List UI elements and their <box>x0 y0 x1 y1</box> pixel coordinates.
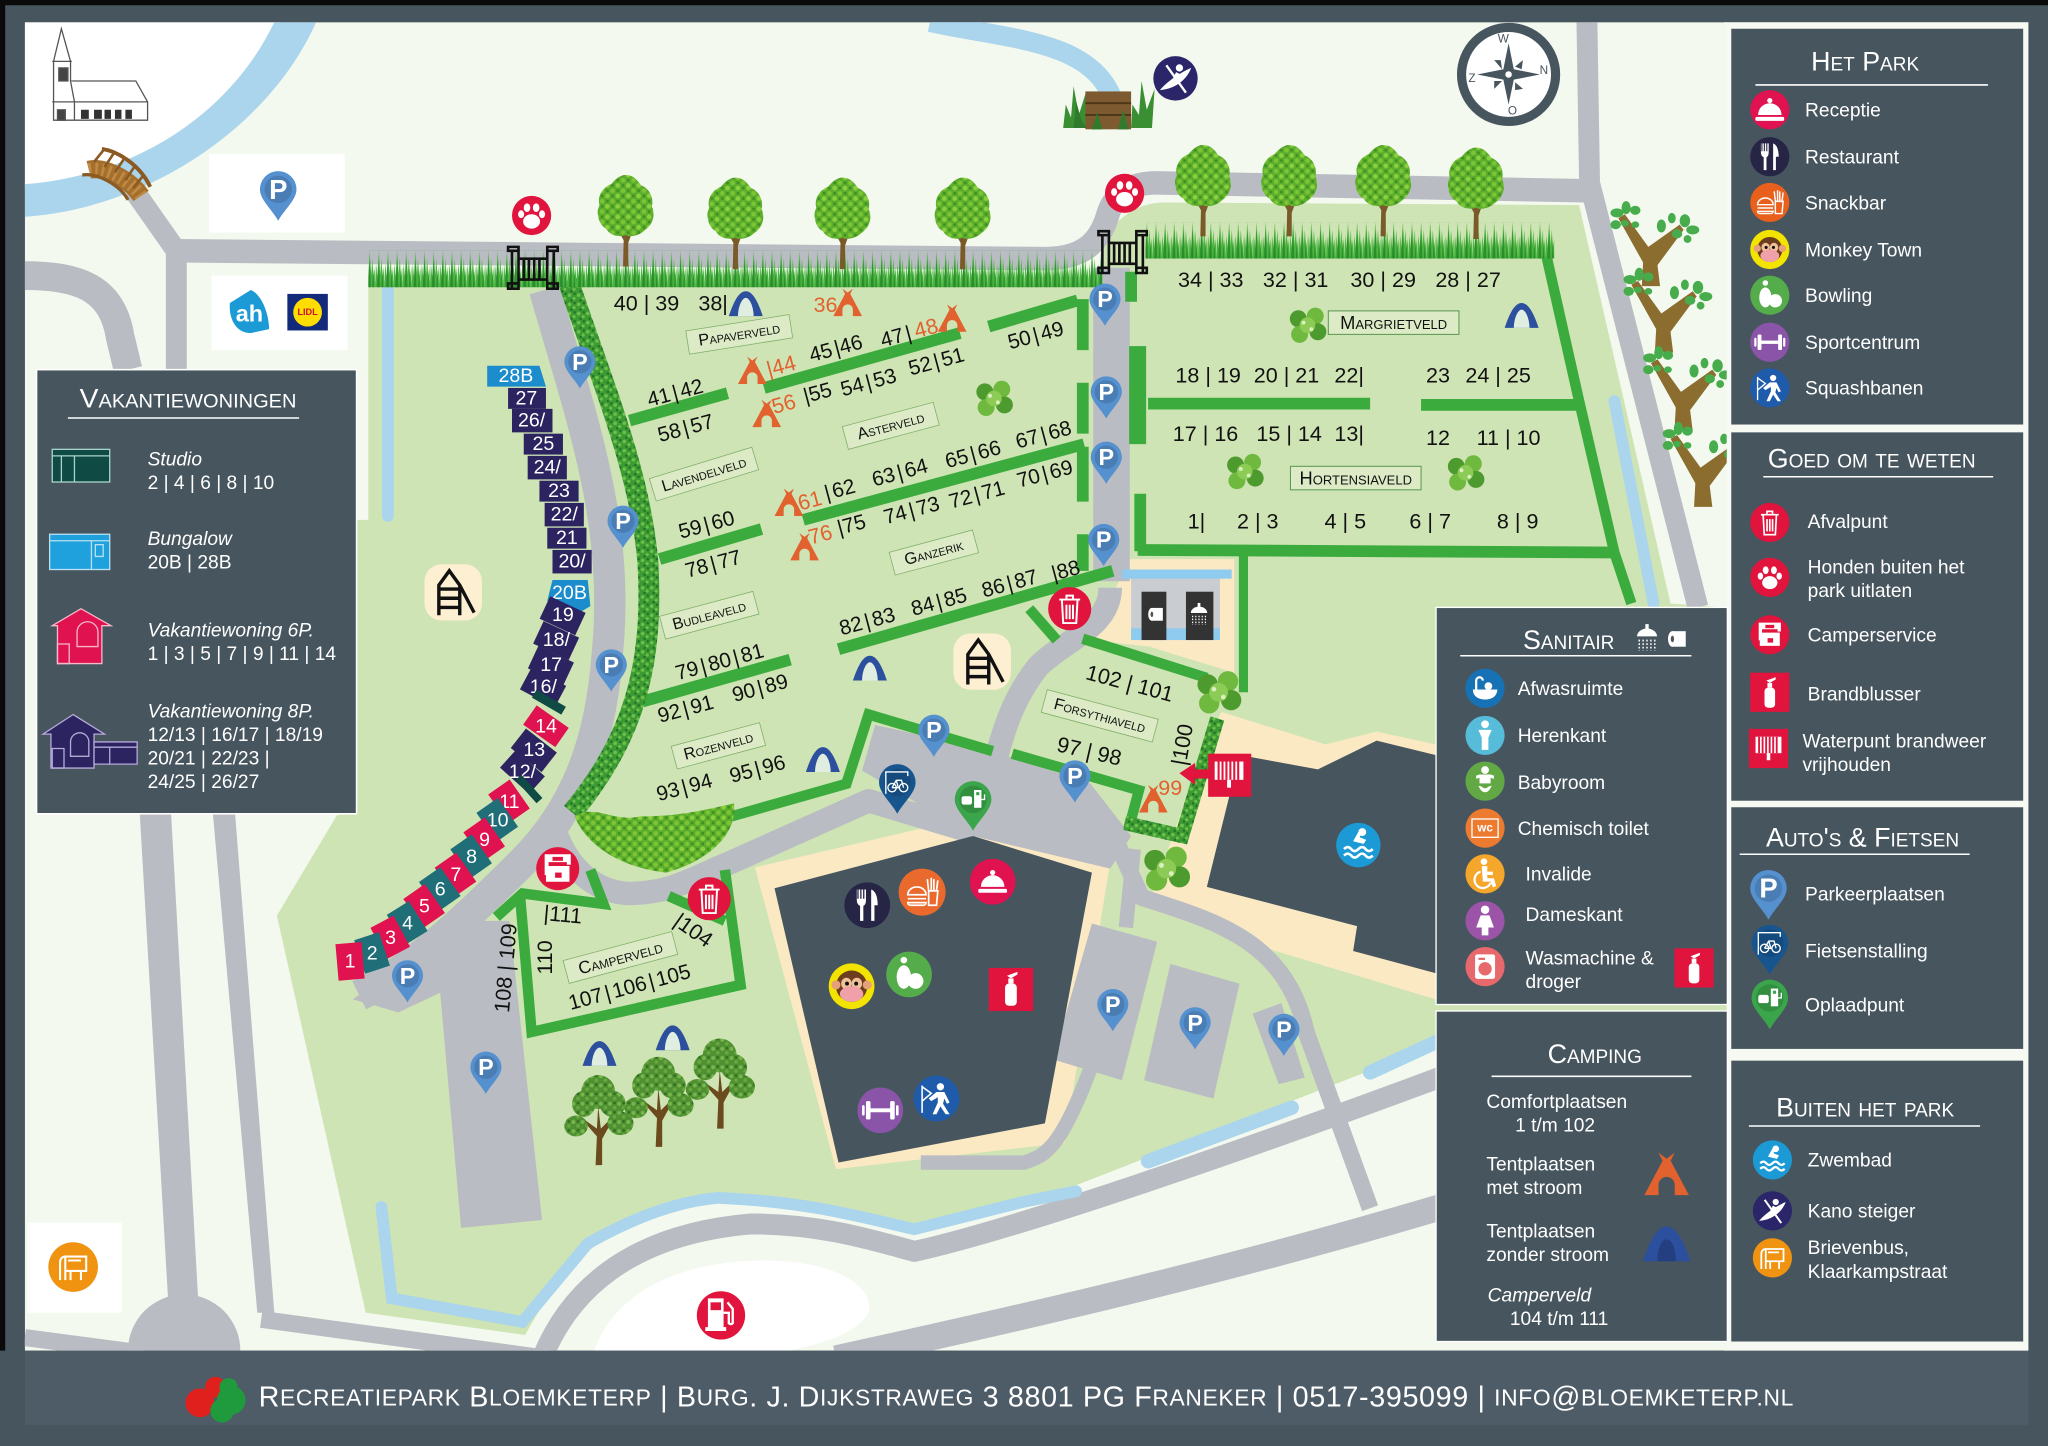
legend: Brandblusser: Brandblusser <box>1808 684 1921 705</box>
legend: Chemisch toilet: wc <box>1476 822 1493 835</box>
icon: blue tent <box>1643 1227 1690 1261</box>
pitch numbers: 102 | 101 <box>1083 660 1176 707</box>
right white strip <box>1724 22 2028 1351</box>
compass: W <box>1498 33 1510 46</box>
holiday houses: 14 <box>535 715 557 737</box>
parking pins: P <box>1096 526 1111 552</box>
holiday houses: 2 <box>367 943 378 965</box>
field name labels: Hortensiaveld <box>1300 468 1412 489</box>
legend text: bungalow <box>148 529 233 573</box>
legend: Squashbanen: Squashbanen <box>1805 379 1923 400</box>
compass <box>1462 27 1556 121</box>
parking pins: P <box>1276 1016 1292 1042</box>
pitch numbers: 34 | 33 <box>1178 267 1244 292</box>
holiday houses: 20B <box>552 582 587 604</box>
text: tentplaatsen met stroom: met stroom <box>1486 1178 1582 1199</box>
legend: Restaurant: Restaurant <box>1805 148 1900 169</box>
legend text: bungalow: 20B | 28B <box>148 552 232 573</box>
holiday houses: 28B <box>498 365 533 387</box>
legend: Receptie: Receptie <box>1805 101 1881 122</box>
pitch numbers: 74 | 73 <box>881 492 942 529</box>
pitch numbers: 82 | 83 <box>837 603 898 640</box>
holiday houses: 21 <box>556 527 578 549</box>
legend: Waterpunt <box>1749 729 1987 776</box>
legend text: studio <box>148 449 274 494</box>
text: comfortplaatsen: 1 t/m 102 <box>1515 1115 1595 1136</box>
holiday houses <box>335 365 592 981</box>
holiday houses: 27 <box>515 387 537 409</box>
heading: Auto's & Fietsen <box>1766 822 1959 852</box>
river top left <box>25 22 316 217</box>
river top <box>930 22 1113 99</box>
pitch numbers: 22| <box>1334 362 1364 387</box>
legend: Bowling <box>1750 276 1872 315</box>
legend: Chemisch toilet: Chemisch toilet <box>1518 819 1650 840</box>
sanitary building <box>1122 570 1232 640</box>
icon: house 6P <box>52 609 111 664</box>
legend: Afwasruimte <box>1465 669 1623 708</box>
legend: Bowling: Bowling <box>1805 286 1872 307</box>
heading: Vakantiewoningen <box>80 383 296 413</box>
text: camperveld: Camperveld <box>1488 1285 1592 1306</box>
legend: Dameskant <box>1465 901 1623 940</box>
legend: Brievenbus <box>1753 1238 1948 1283</box>
panel: Goed om te weten <box>1731 432 2023 801</box>
legend text: house 6P <box>148 620 336 665</box>
main building <box>775 836 1092 1163</box>
legend: Invalide: Invalide <box>1526 865 1592 886</box>
pitch numbers: 92 | 91 <box>655 691 716 728</box>
pitch numbers: 79 | 80 | 81 <box>673 639 766 685</box>
holiday houses: 9 <box>479 829 490 851</box>
compass: O <box>1508 105 1517 118</box>
legend: Afvalpunt <box>1750 503 1888 542</box>
icon: studio <box>52 449 110 482</box>
panel: Sanitair <box>1436 607 1727 1004</box>
pitch numbers: 107 | 106 | 105 <box>566 960 693 1015</box>
legend: Sportcentrum <box>1750 323 1920 362</box>
panel: Buiten het park <box>1731 1061 2023 1342</box>
white outer-area top-left <box>25 22 281 189</box>
holiday houses: 18/ <box>543 629 571 651</box>
field name labels: Camperveld <box>576 937 665 978</box>
pitch numbers: 58 | 57 <box>655 410 716 447</box>
field name labels: Rozenveld <box>682 728 755 764</box>
icon: house 8P <box>43 715 137 768</box>
holiday houses: 10 <box>487 809 509 831</box>
holiday houses: 7 <box>450 864 461 886</box>
holiday houses: 1 <box>345 950 355 972</box>
legend text: studio: Studio <box>148 449 202 470</box>
pitch numbers: 61 <box>795 485 825 515</box>
pitch numbers: 41 | 42 <box>645 375 706 412</box>
pitch numbers: 30 | 29 <box>1350 267 1416 292</box>
legend: Babyroom: Babyroom <box>1518 773 1605 794</box>
holiday houses: 8 <box>466 846 477 868</box>
legend text: bungalow: Bungalow <box>148 529 233 550</box>
pitch numbers: 12 <box>1426 425 1450 450</box>
holiday houses: 22/ <box>551 504 578 526</box>
pitch numbers: 40 | 39 <box>614 291 679 316</box>
bare trees on east side <box>1610 201 1727 507</box>
map <box>25 22 1752 1358</box>
pitch numbers: 97 | 98 <box>1055 732 1124 771</box>
pitch numbers: 24 | 25 <box>1465 362 1531 387</box>
compass: Z <box>1468 72 1476 85</box>
holiday houses: 12/ <box>509 761 537 783</box>
legend: Monkey Town <box>1750 230 1922 269</box>
pitch numbers: 38| <box>698 291 728 316</box>
white petrol area <box>594 1261 869 1351</box>
field name labels <box>563 311 1459 983</box>
pitch numbers: 56 <box>769 388 798 419</box>
dock <box>1063 81 1155 129</box>
heading: Buiten het park <box>1776 1093 1954 1123</box>
mailbox box <box>27 1223 121 1313</box>
extinguisher on building <box>989 968 1033 1011</box>
pitch numbers: 59 | 60 <box>676 507 737 544</box>
legend: Herenkant <box>1465 716 1607 755</box>
pitch numbers: 17 | 16 <box>1173 421 1238 446</box>
parking pins <box>392 284 1299 1094</box>
text: tentplaatsen met stroom <box>1486 1155 1595 1199</box>
pitch numbers: 70 | 69 <box>1014 456 1075 493</box>
field name labels: Asterveld <box>855 408 926 443</box>
pitch numbers: 48 <box>911 313 941 343</box>
legend: Restaurant <box>1750 137 1900 176</box>
legend: Receptie <box>1750 90 1881 129</box>
legend: Wasmachine & droger <box>1465 947 1654 993</box>
holiday houses: 24/ <box>534 457 561 479</box>
legend: Afwasruimte: Afwasruimte <box>1518 679 1623 700</box>
field name labels: Ganzerik <box>902 536 966 569</box>
pitch numbers: 1| <box>1188 509 1205 534</box>
legend text: house 8P <box>148 701 323 793</box>
bridge <box>82 149 150 200</box>
pitch numbers: 86 | 87 <box>979 565 1040 602</box>
pitch numbers: 54 | 53 <box>838 364 899 401</box>
pitch numbers: 8 | 9 <box>1497 509 1538 534</box>
white box with parking: P <box>269 174 287 205</box>
pitch numbers: 11 | 10 <box>1477 425 1541 450</box>
parking pins: P <box>1187 1010 1203 1036</box>
legend: Brandblusser <box>1750 673 1921 712</box>
roads <box>25 22 1698 1358</box>
text: comfortplaatsen: Comfortplaatsen <box>1486 1092 1627 1113</box>
legend: Zwembad <box>1753 1140 1892 1180</box>
legend: Parkeerplaatsen: Parkeerplaatsen <box>1805 884 1945 905</box>
parking pins: P <box>615 508 631 534</box>
church <box>52 29 148 120</box>
pitch numbers: 47 | <box>878 322 914 352</box>
heading: Goed om te weten <box>1768 443 1976 473</box>
legend: Parkeerplaatsen: P <box>1759 873 1778 904</box>
textured hedge <box>568 281 1217 836</box>
heading: Camping <box>1548 1039 1642 1069</box>
parking pins: P <box>603 652 619 678</box>
swimming pool building <box>1207 741 1435 973</box>
legend: Waterpunt: Waterpunt brandweer <box>1802 731 1987 752</box>
logo <box>185 1377 246 1422</box>
park lawn <box>277 202 1727 1335</box>
panel: Het Park <box>1731 29 2023 425</box>
parking pins: P <box>572 349 588 375</box>
trees along the top <box>598 145 1504 269</box>
pitch numbers: 78 | 77 <box>683 546 744 583</box>
legend text: house 6P: 1 | 3 | 5 | 7 | 9 | 11 | 14 <box>148 644 336 665</box>
panel: Auto's & Fietsen <box>1731 807 2023 1049</box>
pitch numbers: 36 <box>813 292 837 317</box>
map round icons <box>512 56 1381 1133</box>
gates <box>508 231 1147 289</box>
legend: Honden: Honden buiten het <box>1808 558 1965 579</box>
footer band background <box>25 1351 2028 1425</box>
legend: Snackbar: Snackbar <box>1805 193 1887 214</box>
legend: Brievenbus: Brievenbus, <box>1808 1238 1909 1259</box>
heading: Sanitair <box>1523 625 1614 655</box>
legend: Wasmachine & droger: droger <box>1526 972 1582 993</box>
parking pins: P <box>1097 286 1113 312</box>
big bush by the road bend <box>575 803 734 873</box>
legend: Sportcentrum: Sportcentrum <box>1805 333 1920 354</box>
pitch numbers: 18 | 19 <box>1175 362 1241 387</box>
camp tents <box>583 289 1539 1066</box>
supermarkets box: LIDL <box>297 307 318 317</box>
land background <box>25 22 1727 1351</box>
legend: Invalide <box>1465 854 1592 893</box>
pitch numbers: 15 | 14 <box>1256 421 1322 446</box>
pitch numbers: 65 | 66 <box>943 436 1004 473</box>
pitch numbers: 110 <box>532 940 557 975</box>
parking pins: P <box>1105 991 1121 1017</box>
pitch numbers: 52 | 51 <box>906 343 967 380</box>
legend: Parkeerplaatsen <box>1750 870 1945 920</box>
holiday houses: 20/ <box>558 551 586 573</box>
text: tentplaatsen zonder stroom: zonder stroom <box>1486 1245 1609 1266</box>
pitch numbers: |104 <box>669 908 718 952</box>
legend: Herenkant: Herenkant <box>1518 726 1607 747</box>
text: camperveld: 104 t/m 111 <box>1510 1309 1608 1330</box>
legend text: house 6P: Vakantiewoning 6P. <box>148 620 314 641</box>
parking pins: P <box>926 717 942 743</box>
pitch numbers <box>489 267 1541 1015</box>
pitch numbers: 45 |46 <box>807 331 865 367</box>
legend: Babyroom <box>1465 762 1605 801</box>
pitch numbers: 32 | 31 <box>1263 267 1328 292</box>
legend text: studio: 2 | 4 | 6 | 8 | 10 <box>148 473 274 494</box>
holiday houses: 4 <box>402 913 413 935</box>
pitch numbers: 50 | 49 <box>1005 317 1066 354</box>
parking pins: P <box>400 963 415 989</box>
panel: Camping <box>1436 1011 1727 1342</box>
heading: Het Park <box>1811 46 1919 76</box>
beige sand areas <box>755 559 1435 1169</box>
holiday houses: 25 <box>532 433 554 455</box>
pitch numbers: 63 | 64 <box>869 454 930 491</box>
pitch numbers: 99 <box>1158 775 1182 800</box>
text: tentplaatsen zonder stroom <box>1486 1221 1609 1266</box>
bushes <box>976 308 1484 891</box>
legend text: house 8P: 12/13 | 16/17 | 18/19 <box>148 725 323 746</box>
holiday houses: 26/ <box>518 410 546 432</box>
supermarkets box: ah <box>236 300 263 326</box>
panel: Vakantiewoningen <box>37 370 357 814</box>
field name labels: Budleaveld <box>670 597 748 634</box>
legend: Snackbar <box>1750 183 1887 222</box>
legend: Waterpunt: vrijhouden <box>1802 755 1891 776</box>
playgrounds <box>424 564 1011 690</box>
legend: Honden: park uitlaten <box>1808 581 1912 602</box>
legend: Honden <box>1750 558 1965 602</box>
field name labels: Forsythiaveld <box>1052 695 1148 737</box>
legend: Camperservice: Camperservice <box>1808 626 1937 647</box>
holiday houses: 23 <box>548 480 570 502</box>
pitch numbers: 13| <box>1334 421 1364 446</box>
icon: shower and toilet roll <box>1637 624 1686 651</box>
parking pins: P <box>478 1054 494 1080</box>
contact line: RECREATIEPARK BLOEMKETERP | BURG. J. DIJKSTRAWEG 3 8801 PG FRANEKER | 0517-395099 | INFO@BLOEMKETERP.NL <box>259 1382 1793 1414</box>
legend: Squashbanen <box>1750 368 1923 408</box>
water point with arrow <box>1179 754 1251 797</box>
icon: extinguisher <box>1674 948 1714 988</box>
holiday houses: 11 <box>499 791 520 813</box>
text: comfortplaatsen <box>1486 1092 1627 1136</box>
field name labels: Lavendelveld <box>660 453 749 496</box>
pitch numbers: 108 | 109 <box>489 922 522 1014</box>
legend: Chemisch toilet <box>1465 809 1650 848</box>
parking pins: P <box>1067 763 1083 789</box>
pitch numbers: 72 | 71 <box>947 477 1007 514</box>
icon: orange tent <box>1644 1153 1689 1195</box>
legend: Oplaadpunt: Oplaadpunt <box>1805 995 1905 1016</box>
holiday houses: 17 <box>540 654 562 676</box>
legend: Dameskant: Dameskant <box>1526 905 1623 926</box>
pitch numbers: 6 | 7 <box>1409 509 1451 534</box>
parking pins: P <box>1099 379 1114 405</box>
legend: Kano steiger <box>1753 1191 1916 1230</box>
legend text: house 8P: Vakantiewoning 8P. <box>148 701 314 722</box>
legend: Zwembad: Zwembad <box>1808 1151 1892 1172</box>
pitch numbers: 90 | 89 <box>730 670 791 707</box>
pitch numbers: 23 <box>1426 362 1450 387</box>
green hedge lines <box>496 256 1631 1032</box>
legend: Camperservice <box>1750 615 1937 654</box>
grass hedge top <box>368 222 1554 287</box>
supermarkets box <box>212 276 347 350</box>
pitch numbers: |55 <box>801 378 834 408</box>
legend text: house 8P: 24/25 | 26/27 <box>148 772 259 793</box>
legend: Wasmachine & droger: Wasmachine & <box>1526 948 1654 969</box>
legend: Kano steiger: Kano steiger <box>1808 1202 1916 1223</box>
charging pin <box>955 781 991 831</box>
pitch numbers: |75 <box>835 510 868 540</box>
bike pin <box>879 764 916 814</box>
pitch numbers: 20 | 21 <box>1254 362 1319 387</box>
pitch numbers: 95 | 96 <box>727 751 788 788</box>
holiday houses: 13 <box>523 739 545 761</box>
pitch numbers: |88 <box>1049 556 1083 586</box>
holiday houses: 16/ <box>530 676 558 698</box>
pitch numbers: |100 <box>1166 722 1198 767</box>
parking pins: P <box>1099 444 1114 470</box>
trees at camperveld <box>564 1038 755 1165</box>
pitch numbers: |44 <box>764 350 799 382</box>
white box with parking <box>209 154 345 233</box>
pitch numbers: 84 | 85 <box>909 584 970 621</box>
legend: Brievenbus: Klaarkampstraat <box>1808 1262 1948 1283</box>
compass: N <box>1540 64 1548 77</box>
legend: Fietsenstalling <box>1752 925 1928 974</box>
holiday houses: 5 <box>419 896 430 918</box>
pitch numbers: 76 <box>805 519 835 549</box>
legend: Oplaadpunt <box>1752 980 1905 1029</box>
pitch numbers: | 62 <box>822 475 858 505</box>
pitch numbers: 93 | 94 <box>654 769 715 806</box>
petrol station icon <box>697 1291 745 1340</box>
streams <box>381 285 1654 1322</box>
pitch numbers: 28 | 27 <box>1435 267 1501 292</box>
text: camperveld <box>1488 1285 1608 1330</box>
text: tentplaatsen zonder stroom: Tentplaatsen <box>1486 1221 1595 1242</box>
legend: Monkey Town: Monkey Town <box>1805 240 1922 261</box>
legend: Fietsenstalling: Fietsenstalling <box>1805 942 1928 963</box>
holiday houses: 6 <box>435 879 446 901</box>
pitch numbers: |111 <box>543 900 583 928</box>
field name labels: Papaverveld <box>697 319 781 350</box>
pitch numbers: 67 | 68 <box>1013 416 1074 453</box>
field name labels: Margrietveld <box>1340 312 1447 333</box>
icon: bungalow <box>50 534 110 570</box>
legend text: house 8P: 20/21 | 22/23 | <box>148 748 270 769</box>
holiday houses: 19 <box>552 604 574 626</box>
text: tentplaatsen met stroom: Tentplaatsen <box>1486 1155 1595 1176</box>
pitch numbers: 2 | 3 <box>1237 509 1279 534</box>
holiday houses: 3 <box>385 927 396 949</box>
legend: Afvalpunt: Afvalpunt <box>1808 512 1888 533</box>
footer <box>185 1377 1793 1422</box>
pitch numbers: 4 | 5 <box>1325 509 1366 534</box>
